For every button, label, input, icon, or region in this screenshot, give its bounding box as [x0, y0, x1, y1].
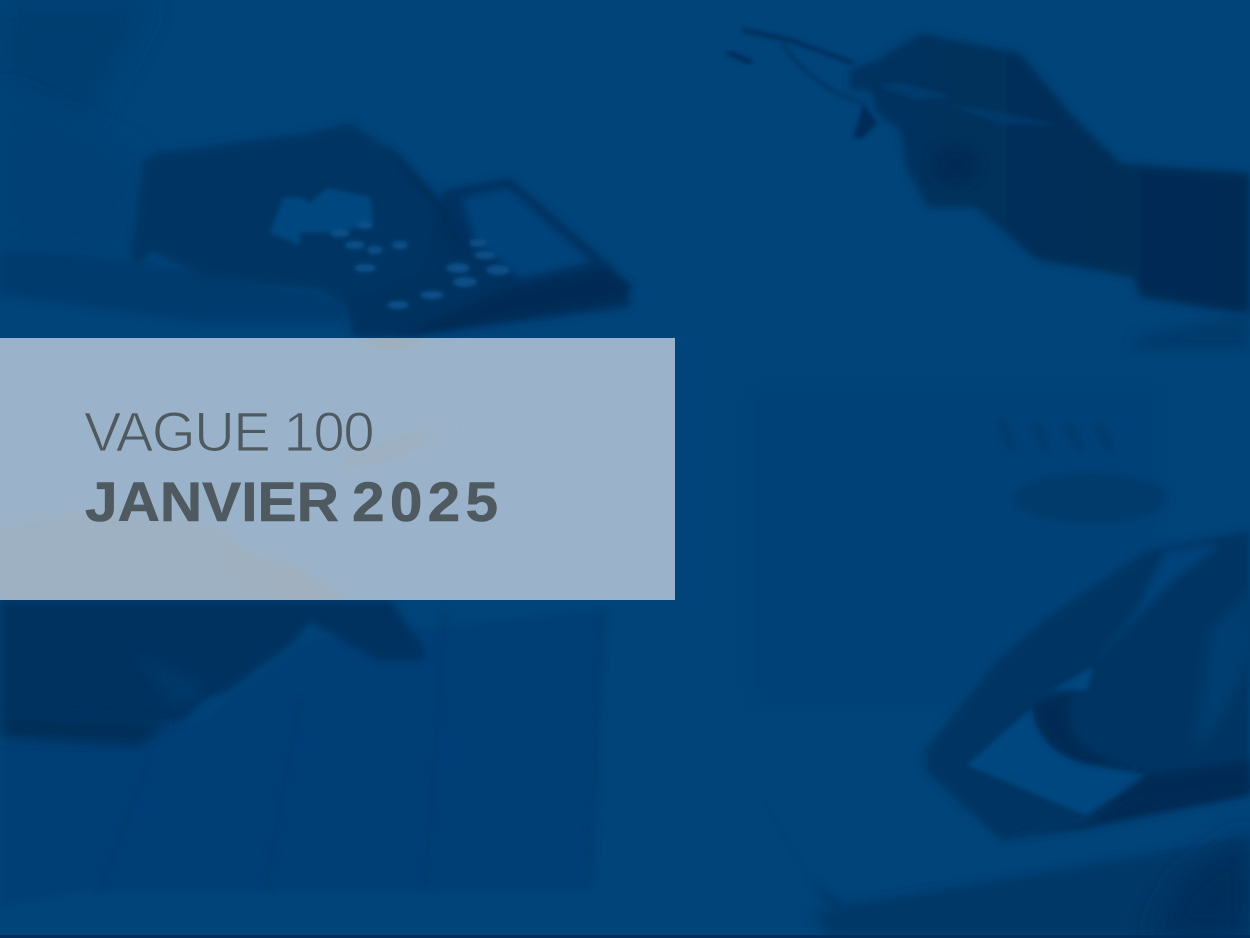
panel: title band — [0, 338, 675, 600]
icon: glasses held by right hand — [727, 30, 877, 138]
top-left dark corner — [0, 0, 150, 125]
bottom edge — [0, 935, 1250, 938]
panel photo tint — [213, 338, 415, 600]
icon: lower-right hand on tablet — [925, 530, 1250, 840]
heading: wave number: VAGUE 100 — [84, 400, 373, 463]
icon: upper right hand — [850, 33, 1250, 315]
icon: lower-left hand pointing — [0, 600, 425, 745]
icon: left hand on calculator — [0, 123, 462, 330]
tablet lower right — [715, 720, 1250, 915]
icon: calculator — [330, 150, 632, 337]
document lines centre-right — [830, 376, 1250, 380]
heading: date: JANVIER 2025 — [85, 470, 503, 533]
spreadsheet lower left — [0, 610, 605, 905]
chart marks on document — [995, 418, 1168, 524]
